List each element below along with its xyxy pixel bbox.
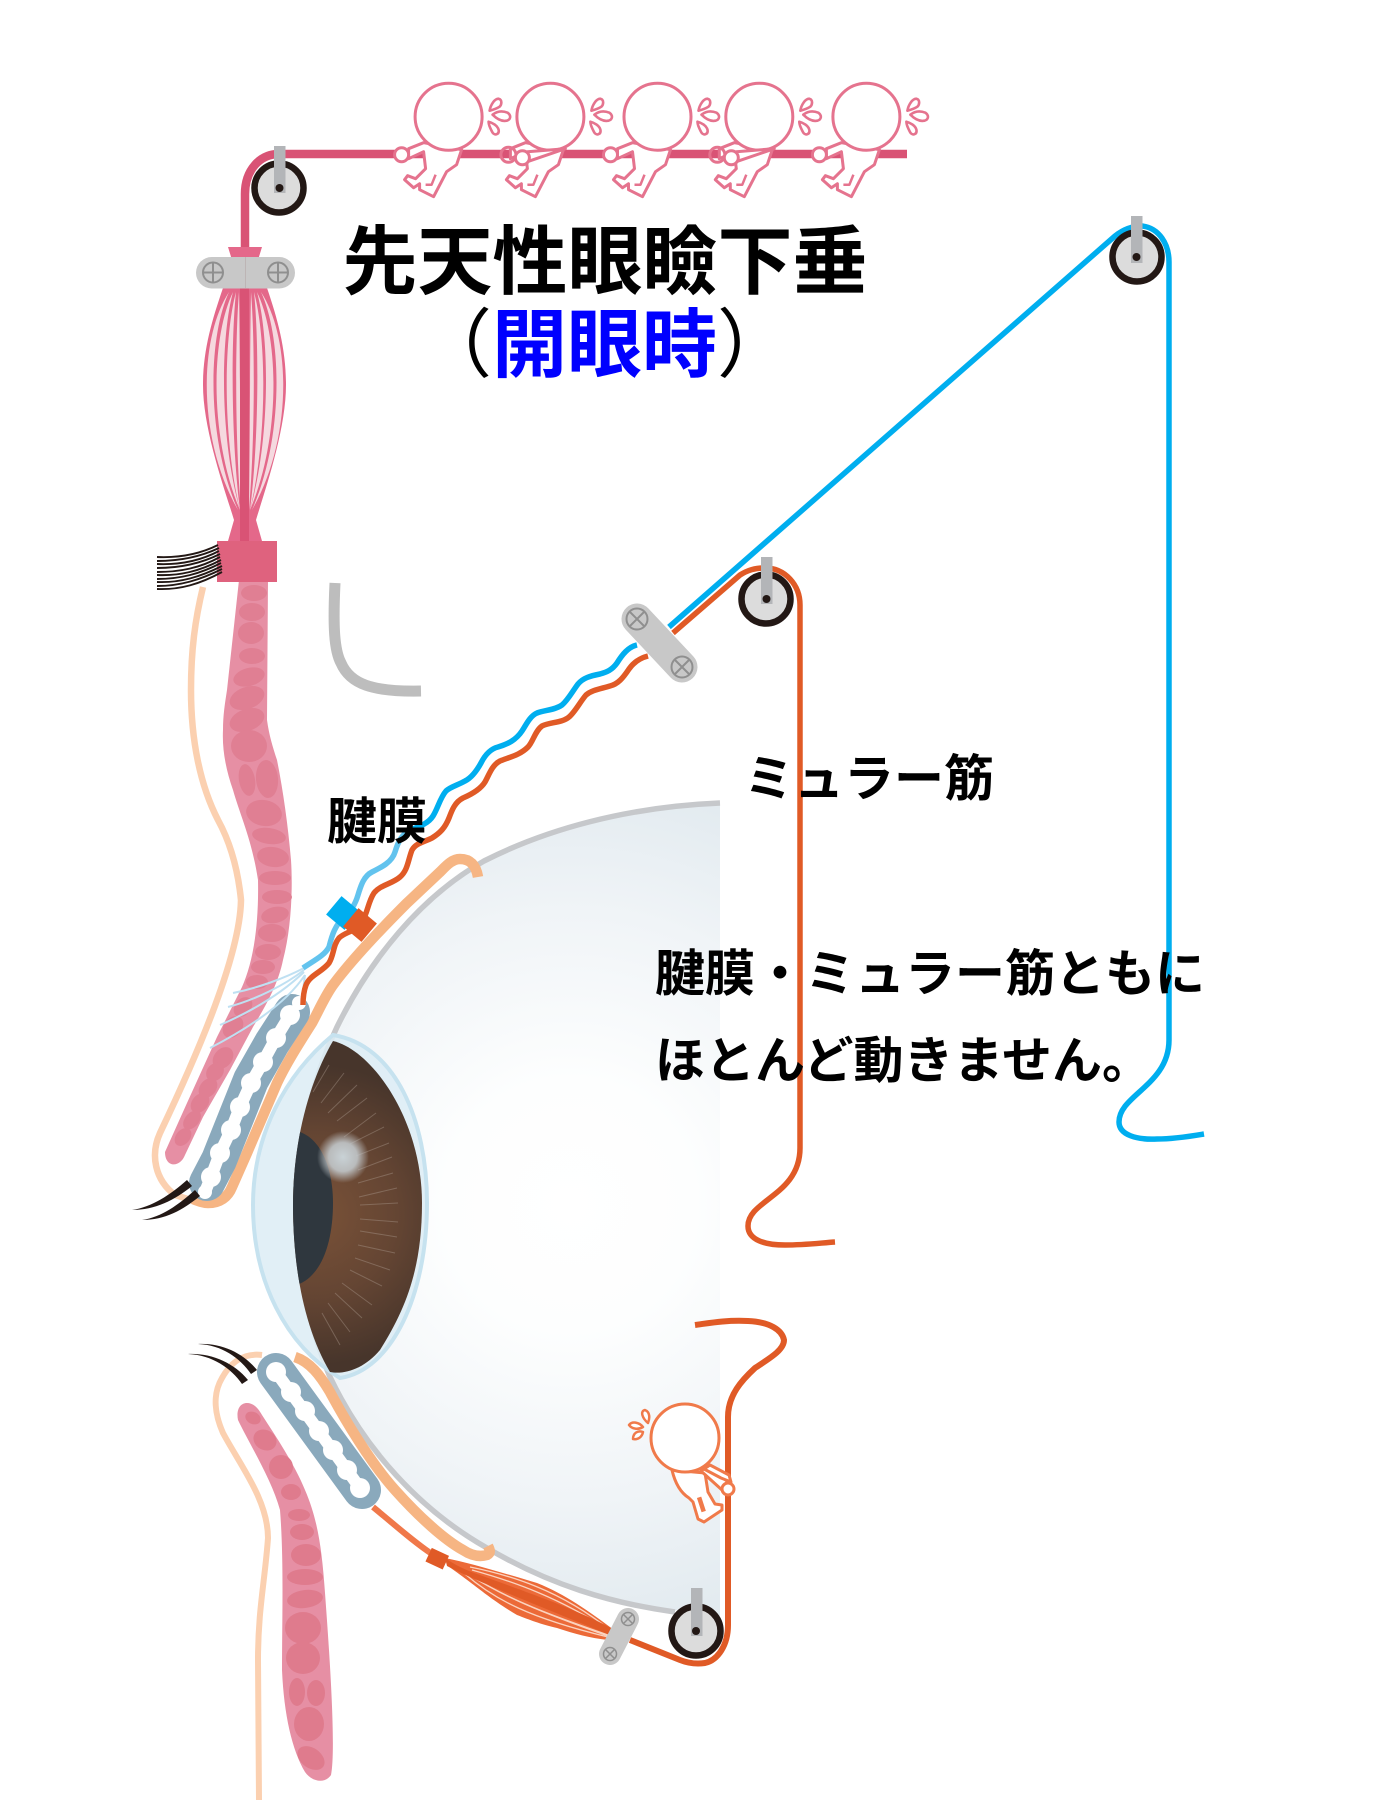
top clamp — [196, 257, 295, 288]
aponeurosis fibres fan — [210, 968, 305, 1048]
upper tarsus plate — [198, 996, 306, 1199]
note text: ほとんど動きません。 — [655, 1033, 1152, 1089]
figure 2 — [501, 83, 612, 197]
lower eyelid muscle — [237, 1403, 333, 1781]
lower eyelash pair — [188, 1344, 257, 1384]
muller muscle orange rope — [673, 568, 835, 1245]
figure 3 — [604, 83, 719, 197]
eyeball sclera — [298, 803, 720, 1616]
iris and pupil — [280, 1041, 422, 1373]
label: muller muscle: ミュラー筋 — [744, 751, 994, 807]
cornea — [253, 1035, 427, 1378]
upper eyelash pair — [132, 1180, 200, 1220]
levator muscle — [203, 247, 286, 582]
figure 1 — [395, 83, 510, 197]
lower retractor rope — [373, 1507, 432, 1554]
muller muscle orange wave — [303, 656, 648, 1005]
lower tarsus plate — [266, 1362, 370, 1498]
diagonal clamp — [626, 608, 692, 678]
top-left pulley — [254, 146, 304, 212]
bottom clamp — [604, 1612, 634, 1660]
upper right pulley — [1112, 216, 1162, 282]
figure 4 — [710, 83, 821, 197]
aponeurosis blue marker — [326, 896, 360, 930]
lower peach skin line — [216, 1355, 268, 1800]
muller orange marker — [343, 908, 377, 942]
upper peach skin line — [155, 587, 241, 1203]
upper eyelashes bundle — [157, 545, 222, 589]
blue rope wave saturated section — [410, 645, 637, 830]
figure 5 — [812, 83, 928, 197]
upper conjunctiva — [193, 859, 478, 1203]
gray curved mark — [334, 583, 421, 691]
bottom orange rope — [630, 1321, 784, 1664]
orange figure — [629, 1404, 734, 1522]
lower conjunctiva — [295, 1357, 490, 1556]
muller pulley — [742, 557, 790, 624]
label: aponeurosis: 腱膜 — [327, 794, 427, 850]
bottom pulley — [672, 1588, 720, 1656]
lower retractor muscle — [425, 1548, 615, 1640]
title: 先天性眼瞼下垂 — [342, 220, 868, 304]
upper eyelid muscle — [165, 580, 292, 1164]
note text — [655, 946, 1205, 1089]
pink pulling figures — [395, 83, 928, 197]
top pink rope — [245, 154, 907, 247]
blue rope straight and tail — [669, 226, 1204, 1139]
levator aponeurosis pale lower section — [303, 830, 410, 968]
note text: 腱膜・ミュラー筋ともに — [655, 946, 1205, 1002]
subtitle open-eye: （開眼時） — [417, 303, 792, 387]
